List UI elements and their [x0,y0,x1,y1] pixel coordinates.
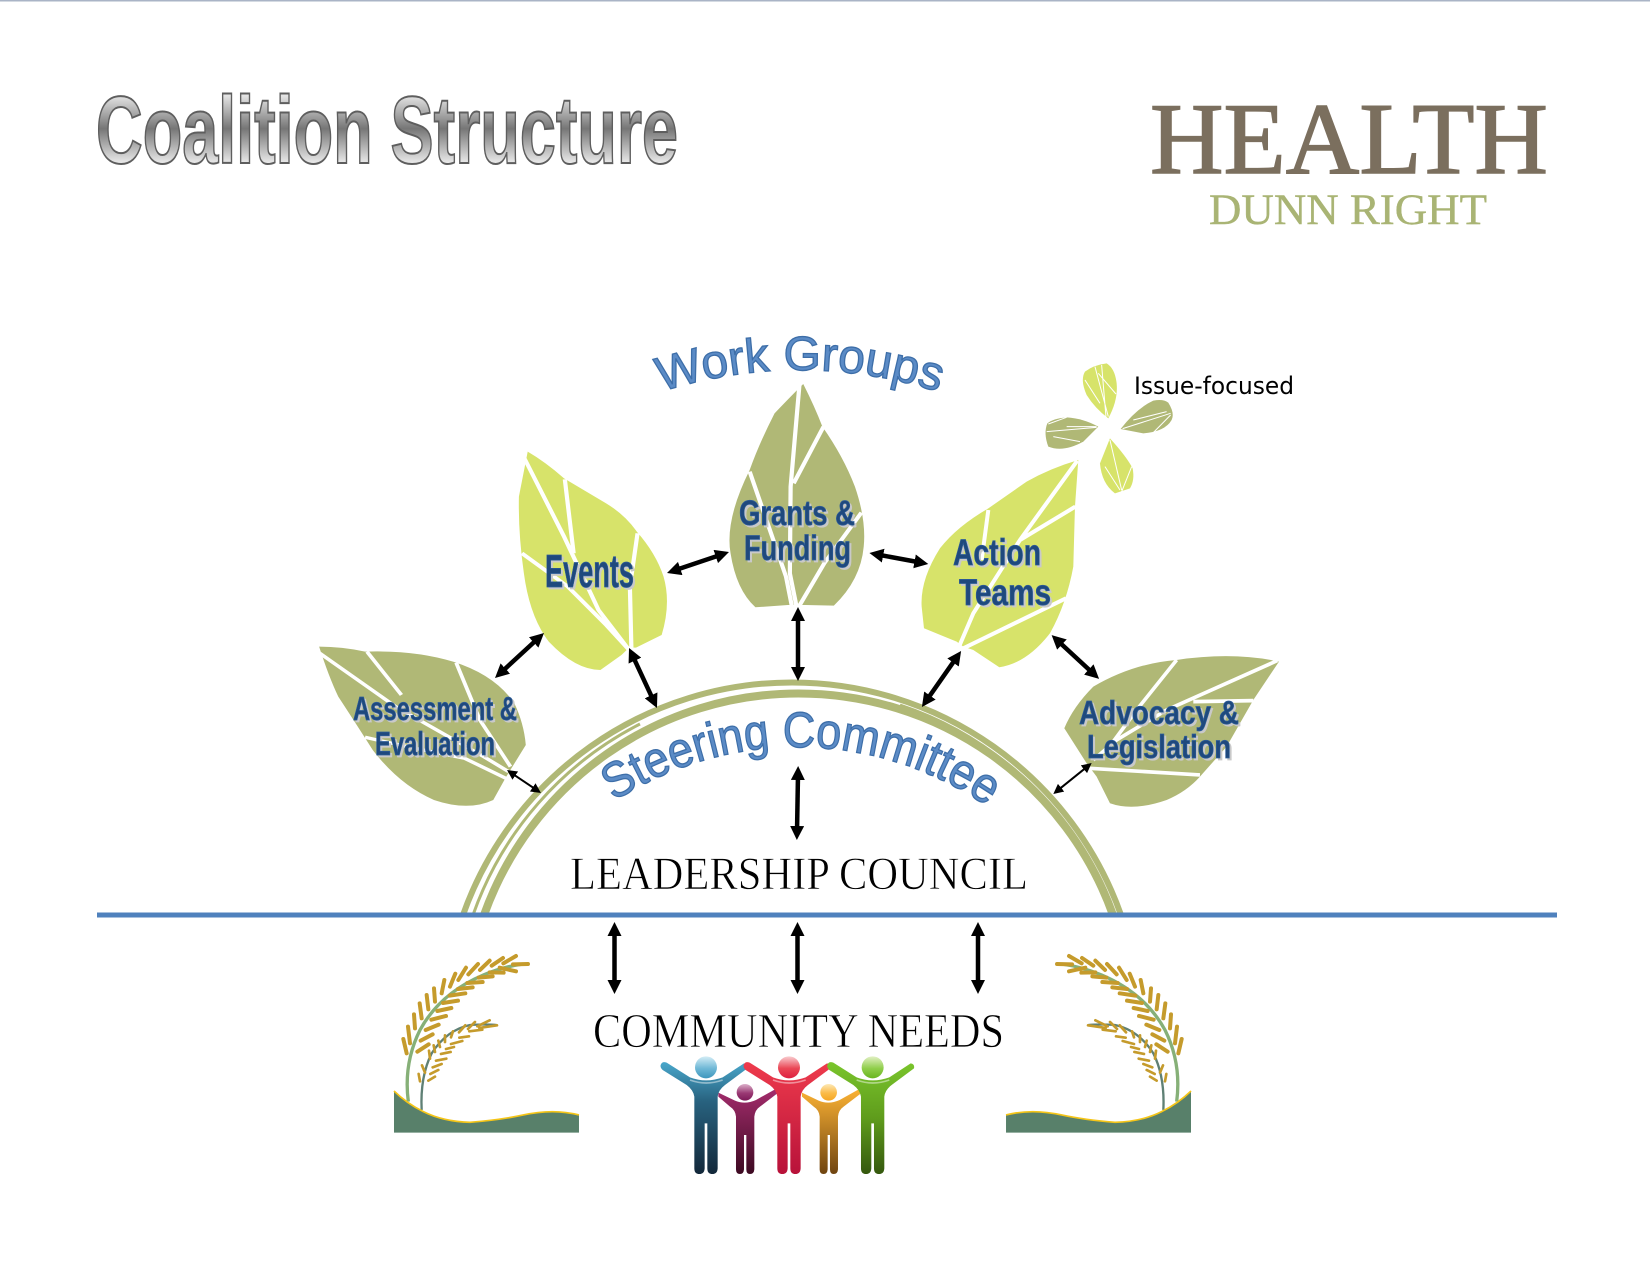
leaf: Advocacy and Legislation [1064,656,1279,807]
leaf labels: Funding [744,529,851,568]
leaf labels: Evaluation [375,725,495,762]
divider: blue ground line [97,912,1557,918]
logo: Health Dunn Right: HEALTH [1150,83,1548,196]
icon: wheat left [394,956,579,1133]
leaf labels: Grants & [739,494,855,533]
top page edge line [0,0,1650,2]
leaf labels: Teams [959,572,1051,613]
label: Issue-focused: Issue-focused [1134,372,1294,400]
leaf: Action Teams [922,460,1078,667]
heading: Steering Committee: Steering Committee [602,712,997,803]
heading: Work Groups: Work Groups [652,336,943,391]
icon: wheat right [1006,956,1191,1133]
text: Community Needs: COMMUNITY NEEDS [593,1003,1004,1058]
arrows: two-way connections [501,554,1093,986]
text: Leadership Council: LEADERSHIP COUNCIL [570,848,1028,900]
leaf labels: Action [953,532,1041,573]
leaf labels: Legislation [1087,728,1231,765]
leaf: Events [519,452,667,670]
logo: Health Dunn Right: DUNN RIGHT [1209,187,1487,234]
title: Coalition Structure [96,77,678,184]
leaf labels: Events [545,545,634,597]
arch: steering committee dome [463,682,1121,915]
leaf: Grants and Funding [729,384,864,607]
leaf: Assessment and Evaluation [319,647,526,806]
leaf labels [353,494,1239,765]
icon: issue-focused leaf cluster [1046,363,1173,493]
leaf labels: Advocacy & [1079,694,1239,731]
icon: community people group [661,1056,914,1174]
leaf labels: Assessment & [353,690,517,727]
